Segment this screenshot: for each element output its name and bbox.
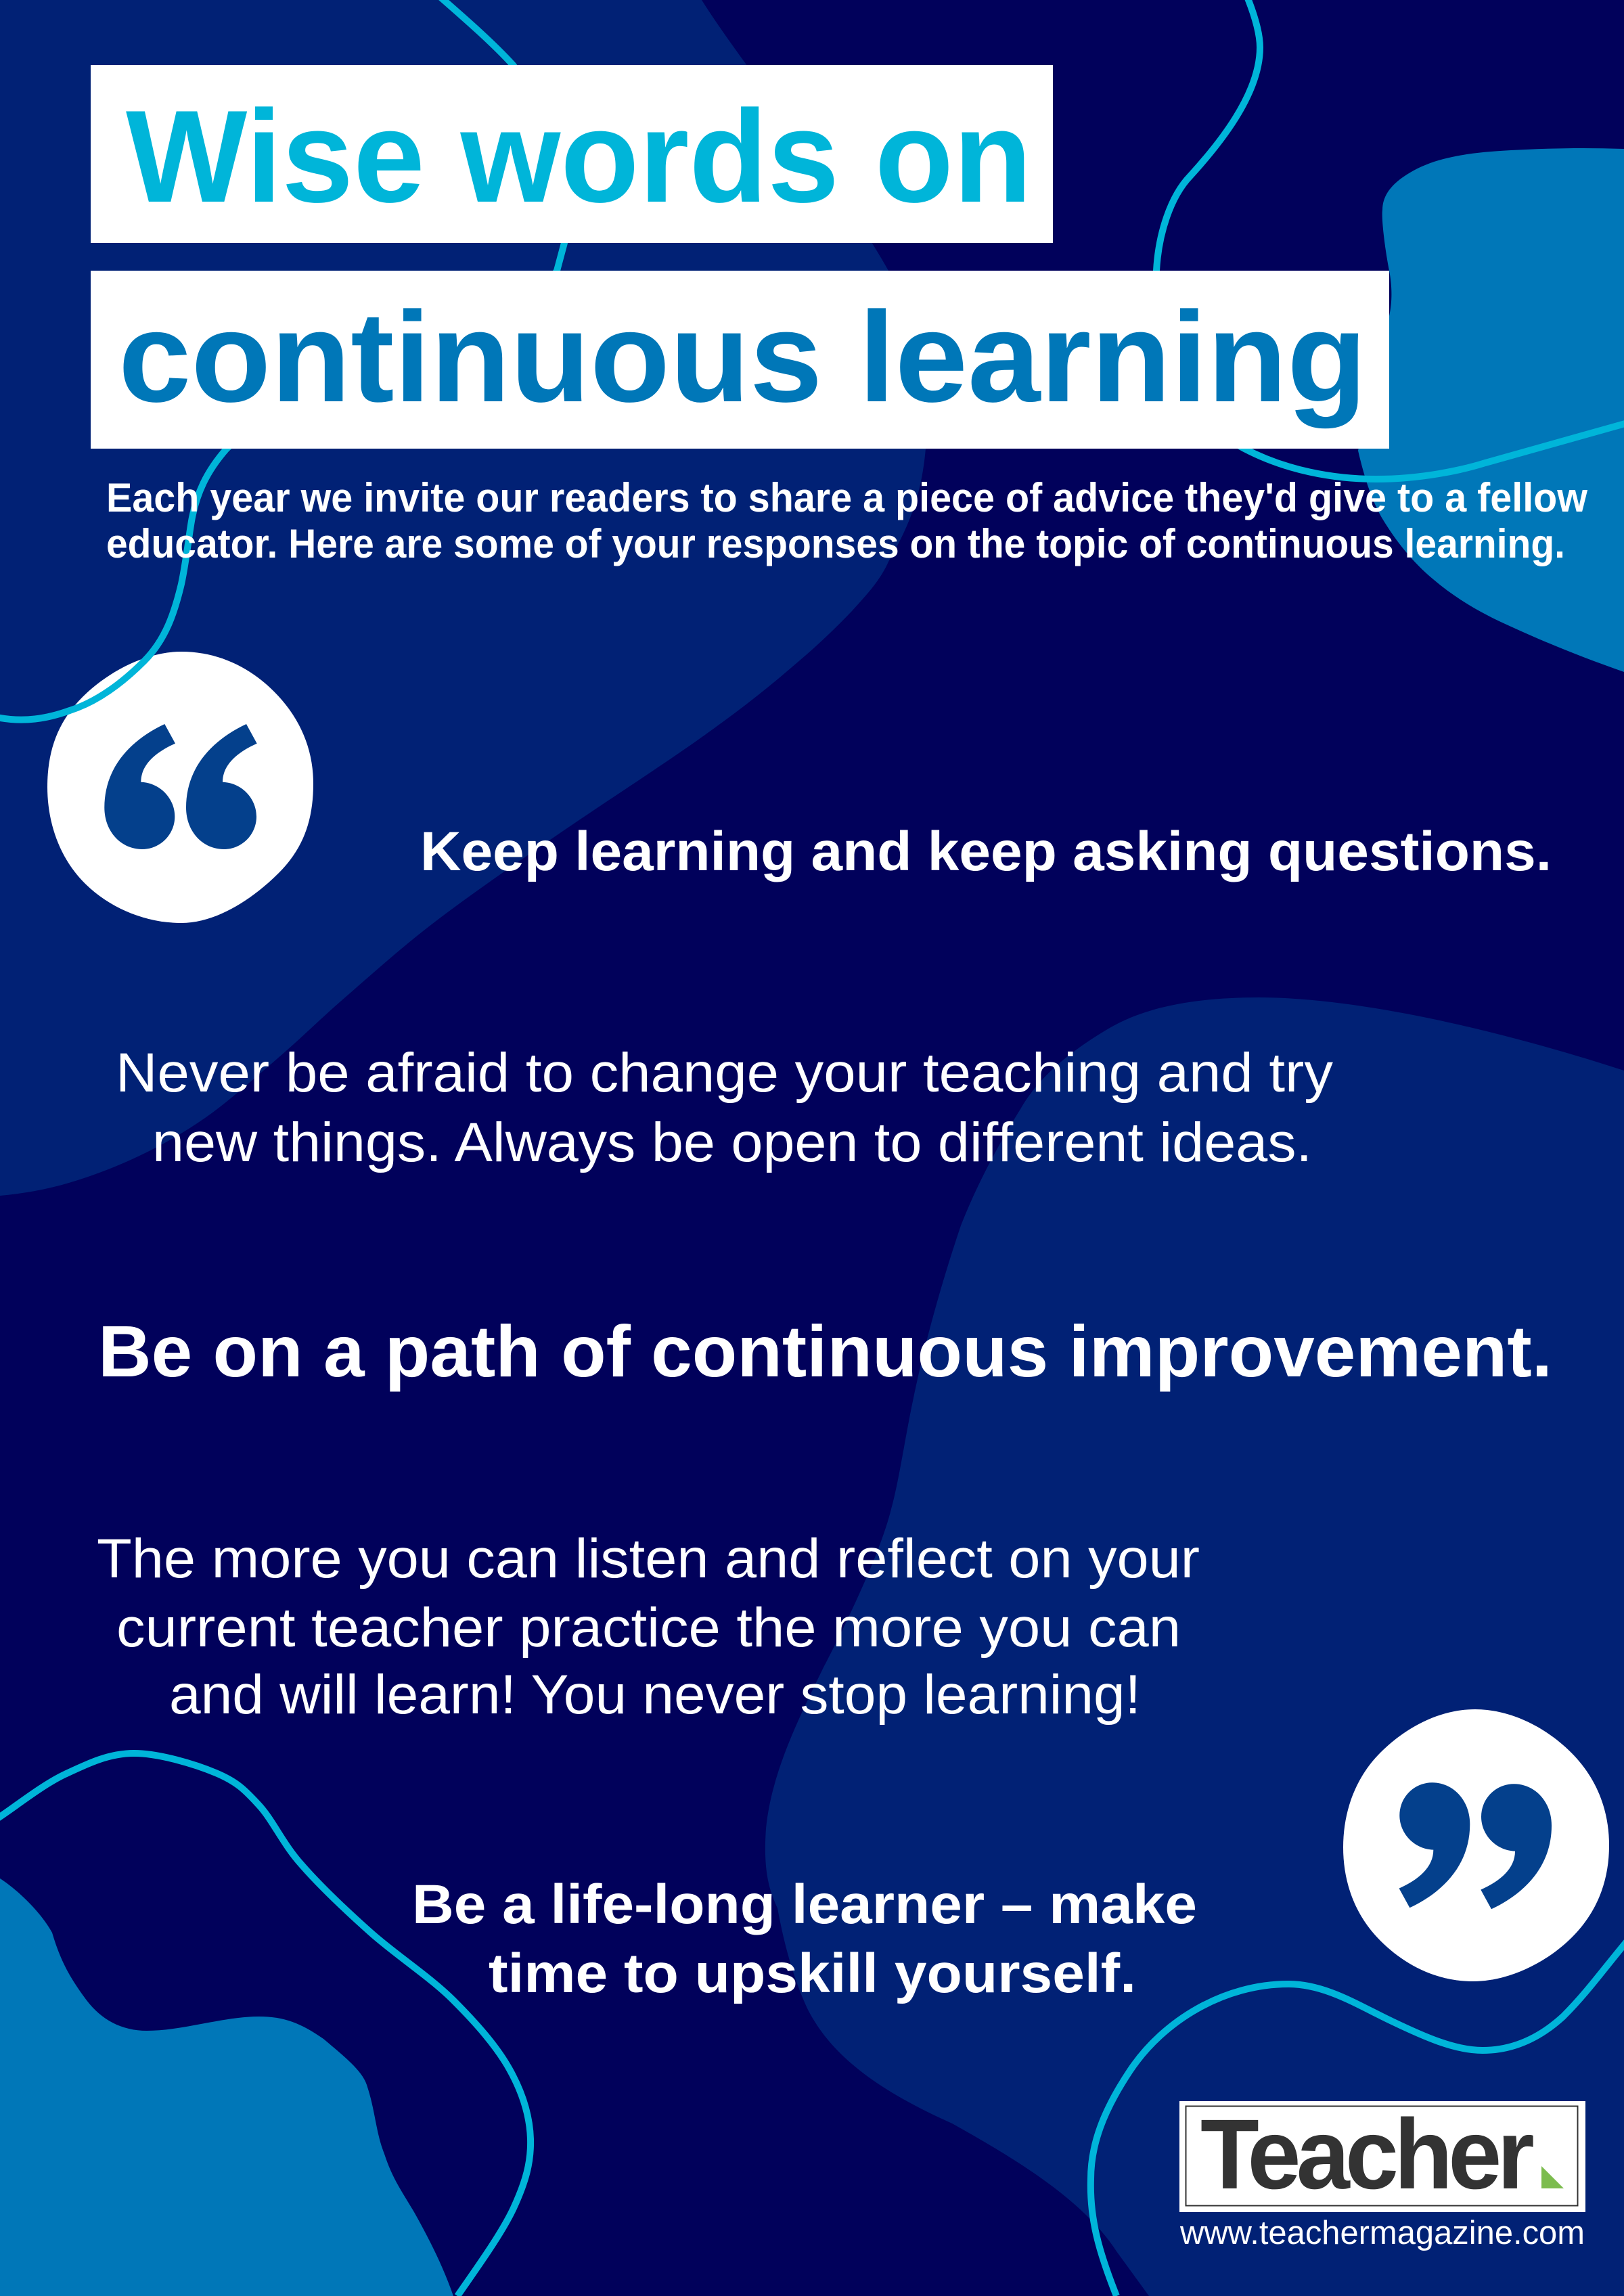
cyan curve: bottom-right [1091, 1941, 1624, 2296]
cyan curve: top-left [0, 0, 566, 720]
cyan curve: top-right [1156, 0, 1624, 479]
title [91, 65, 1389, 449]
icon: opening quotation mark [47, 652, 313, 923]
title line 2: continuous learning [118, 286, 1367, 429]
quote 5: time to upskill yourself. [489, 1943, 1136, 2004]
quote 4: and will learn! You never stop learning! [169, 1664, 1141, 1726]
logo: Teacher: Teacher [1200, 2099, 1533, 2210]
title line 1: Wise words on [126, 83, 1032, 230]
quote 2: Never be afraid to change your teaching and try [116, 1042, 1333, 1104]
background blob: top-right blue [1358, 148, 1624, 672]
intro text: educator. Here are some of your responses on the topic of continuous learning. [106, 521, 1565, 566]
quote 4: The more you can listen and reflect on your [97, 1528, 1200, 1590]
website url: www.teachermagazine.com [1179, 2215, 1585, 2251]
quote 4: current teacher practice the more you can [116, 1597, 1181, 1659]
quote 4 [97, 1528, 1200, 1726]
quote 5: Be a life-long learner – make [412, 1874, 1197, 1935]
background blob: bottom-left blue [0, 1878, 453, 2296]
cyan curve: bottom-left [0, 1753, 531, 2296]
quote 2 [116, 1042, 1333, 1173]
quote 5 [412, 1874, 1197, 2004]
intro text [106, 475, 1587, 566]
background blob: top-left navy [0, 0, 926, 1196]
icon: closing quotation mark [1343, 1709, 1609, 1981]
quote 1: Keep learning and keep asking questions. [420, 821, 1552, 882]
background blob: lower-right navy [765, 997, 1624, 2296]
intro text: Each year we invite our readers to share a piece of advice they'd give to a fellow [106, 475, 1587, 520]
icon: green triangle [1541, 2166, 1564, 2188]
quote 3: Be on a path of continuous improvement. [98, 1310, 1552, 1392]
quote 2: new things. Always be open to different ideas. [152, 1112, 1312, 1173]
